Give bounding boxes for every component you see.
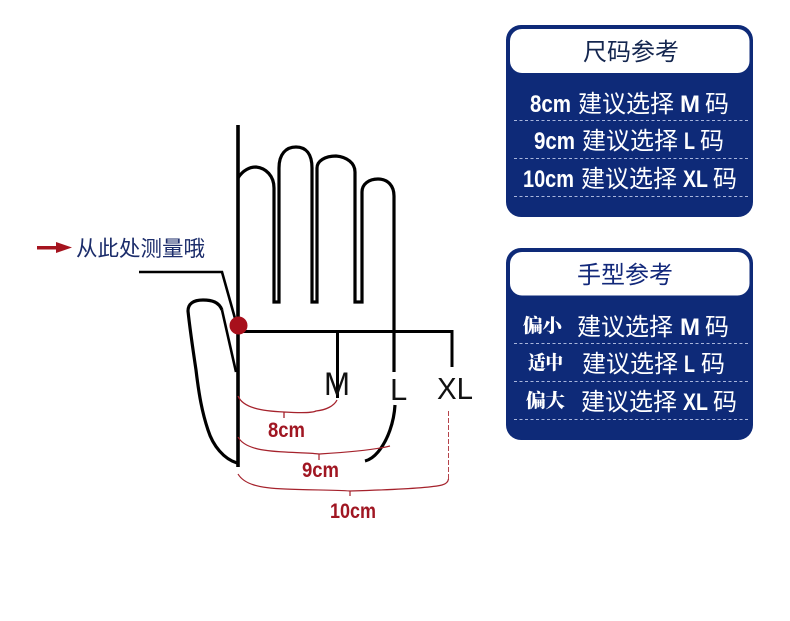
row: 9cm (534, 128, 724, 155)
row: medium hand: 建议选择 (582, 351, 678, 378)
XL dashed guide (448, 411, 450, 480)
row: 10cm: XL (683, 166, 708, 193)
panel background (506, 248, 753, 440)
row: 8cm: 码 (705, 91, 729, 118)
row: small hand (523, 311, 729, 341)
row: 10cm (523, 166, 737, 193)
row: large hand: XL (683, 389, 708, 416)
row: large hand (526, 386, 737, 416)
measurement line (238, 332, 452, 367)
label 8cm: 8cm (268, 419, 305, 442)
size label L: L (390, 372, 407, 407)
row: 8cm: 建议选择 (578, 91, 674, 118)
row: large hand: 码 (713, 389, 737, 416)
heading: hand type reference: 手型参考 (577, 262, 673, 289)
hand outline: palm lower curve (365, 405, 395, 461)
row: 10cm: 建议选择 (581, 166, 677, 193)
panel: size reference (506, 25, 753, 217)
hand outline: thumb (188, 300, 237, 463)
label 10cm: 10cm (330, 500, 376, 523)
label 9cm: 9cm (302, 459, 339, 482)
row: 8cm: 8cm (530, 91, 571, 118)
icon: red arrow (37, 242, 72, 253)
panel: hand type reference (506, 248, 753, 440)
heading: size reference (510, 29, 750, 73)
row: medium hand: L (684, 351, 695, 378)
hand diagram (139, 125, 473, 523)
row: 9cm: 码 (700, 128, 724, 155)
callout: measure from here (37, 237, 205, 261)
panel background (506, 25, 753, 217)
measuring point dot (230, 316, 248, 334)
row: small hand: 建议选择 (577, 314, 673, 341)
row: large hand: 建议选择 (581, 389, 677, 416)
row: 8cm: M (680, 91, 700, 118)
ruler line: wrist edge (236, 125, 240, 467)
size label M: M (324, 366, 350, 402)
row: large hand: 偏大 (526, 386, 565, 413)
brace 10cm (238, 474, 448, 496)
brace 9cm (238, 437, 390, 460)
callout text: 从此处测量哦 (76, 237, 205, 261)
M size line (336, 331, 339, 398)
row: medium hand: 适中 (528, 348, 563, 375)
row: 10cm: 码 (713, 166, 737, 193)
row: small hand: 偏小 (523, 311, 564, 338)
heading: hand type reference (510, 252, 750, 296)
row: 10cm: 10cm (523, 166, 574, 193)
brace 8cm (238, 396, 337, 418)
row: 9cm: 建议选择 (582, 128, 678, 155)
row: 9cm: L (684, 128, 695, 155)
row: 8cm (530, 91, 729, 118)
row: medium hand: 码 (701, 351, 725, 378)
row: medium hand (528, 348, 725, 378)
heading: size reference: 尺码参考 (583, 39, 679, 66)
row: small hand: M (680, 314, 700, 341)
row: 9cm: 9cm (534, 128, 575, 155)
thumb inner edge (222, 310, 236, 372)
leader line to measuring point (139, 272, 236, 322)
hand outline: fingers (238, 147, 394, 372)
row: small hand: 码 (705, 314, 729, 341)
size label XL: XL (437, 371, 473, 406)
